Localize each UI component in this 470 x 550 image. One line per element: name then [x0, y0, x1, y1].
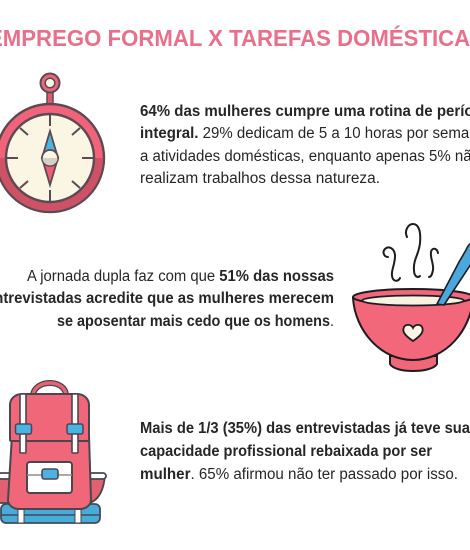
- icon: backpack: [0, 383, 106, 523]
- text block: jornada dupla: [0, 268, 334, 330]
- text block: período integral: [140, 103, 470, 187]
- text block: capacidade rebaixada: mulher. 65% afirmou não ter passado por isso.: [140, 466, 458, 483]
- text block: capacidade rebaixada: [140, 420, 470, 483]
- text block: capacidade rebaixada: capacidade profissional rebaixada por ser: [140, 443, 432, 460]
- icon: compass: [0, 74, 104, 212]
- text block: período integral: realizam trabalhos dessa natureza.: [140, 170, 380, 187]
- text block: jornada dupla: A jornada dupla faz com que 51% das nossas: [27, 268, 334, 285]
- icon: soup bowl: [353, 224, 470, 371]
- text block: jornada dupla: se aposentar mais cedo que os homens.: [57, 313, 334, 330]
